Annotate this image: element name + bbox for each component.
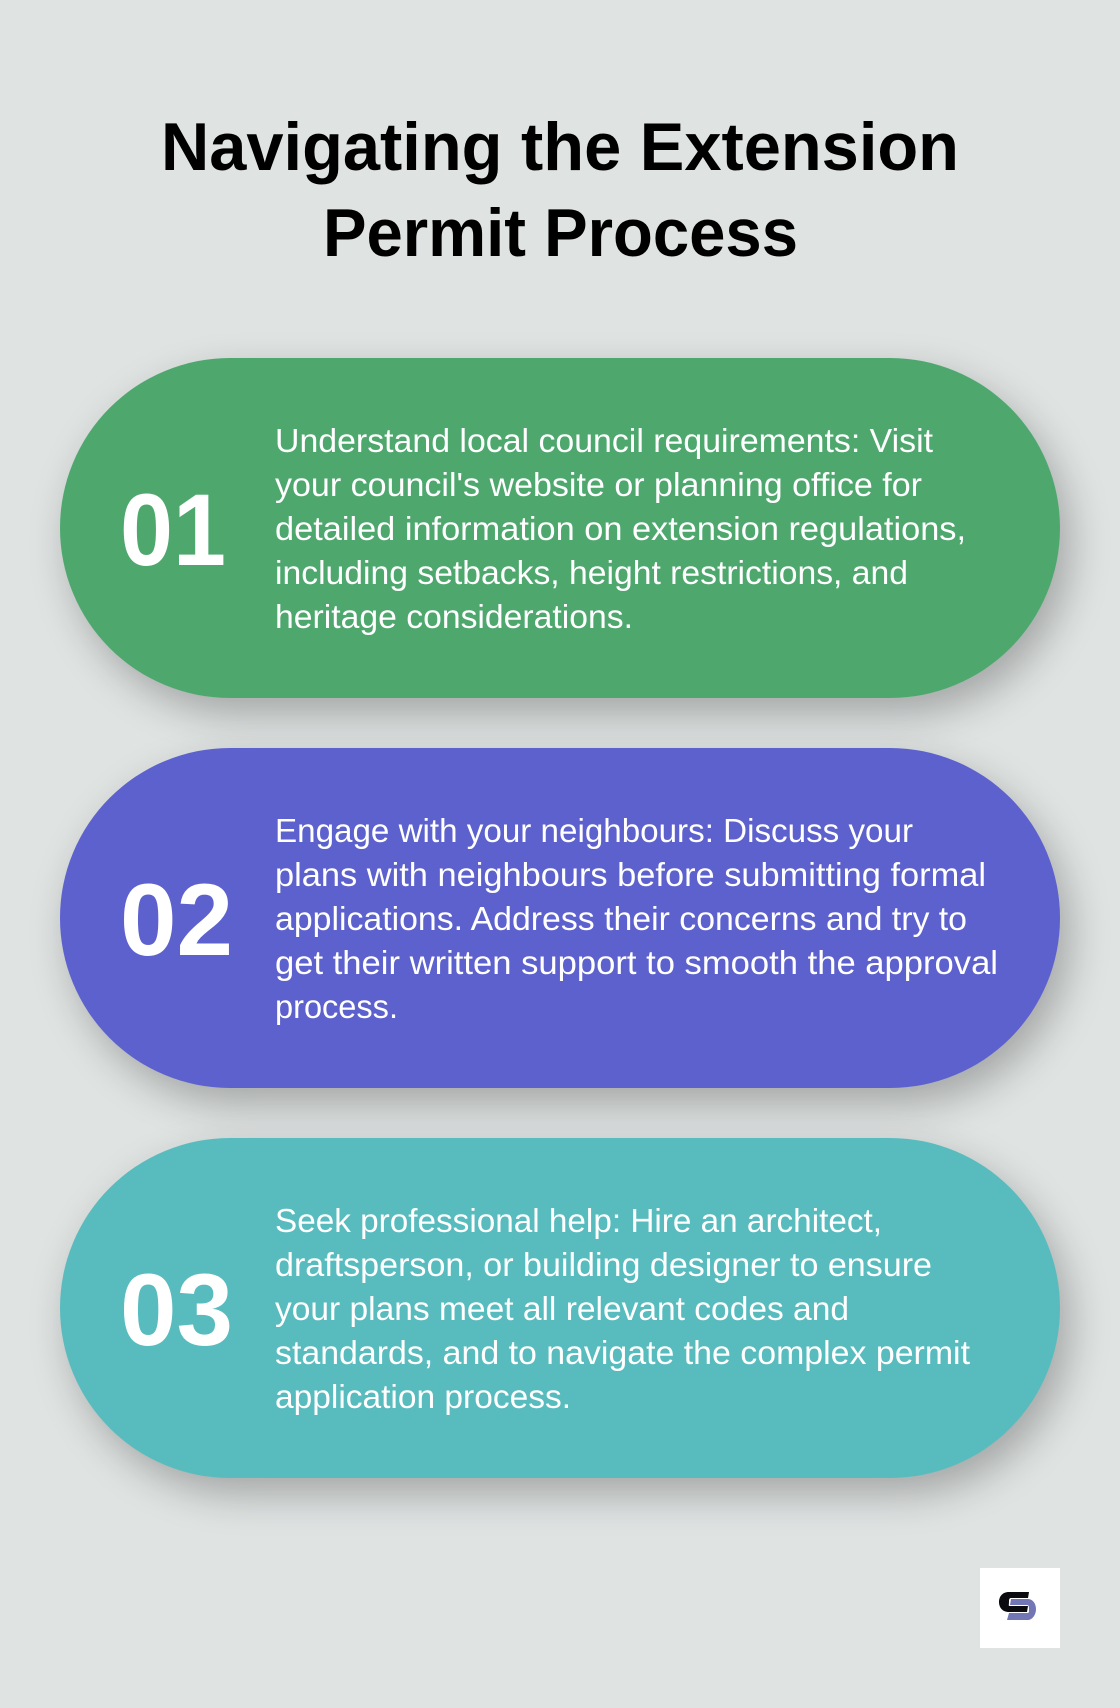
number 01: 01 [120, 473, 226, 587]
title: Permit Process [323, 195, 798, 271]
text: step 03 description: standards, and to navigate the complex permit [275, 1334, 970, 1371]
text: step 03 description [275, 1202, 970, 1415]
text: step 03 description: application process. [275, 1378, 571, 1415]
text: step 03 description: Seek professional help: Hire an architect, [275, 1202, 882, 1239]
text: step 02 description: applications. Address their concerns and try to [275, 900, 967, 937]
panel: step 02 [60, 748, 1060, 1088]
text: step 02 description: get their written support to smooth the approval [275, 944, 998, 981]
text: step 02 description [275, 812, 998, 1025]
text: step 03 description: your plans meet all relevant codes and [275, 1290, 849, 1327]
panel: step 01 [60, 358, 1060, 698]
text: step 01 description: Understand local council requirements: Visit [275, 422, 933, 459]
text: step 01 description: your council's website or planning office for [275, 466, 922, 503]
text: step 03 description: draftsperson, or building designer to ensure [275, 1246, 932, 1283]
title: Navigating the Extension [161, 109, 959, 185]
number 03: 03 [120, 1253, 233, 1367]
text: step 01 description: including setbacks, height restrictions, and [275, 554, 908, 591]
text: step 02 description: process. [275, 988, 398, 1025]
text: step 02 description: plans with neighbours before submitting formal [275, 856, 986, 893]
panel: step 03 [60, 1138, 1060, 1478]
icon: logo badge [980, 1568, 1060, 1648]
text: step 01 description: detailed information on extension regulations, [275, 510, 966, 547]
title [161, 109, 959, 271]
text: step 02 description: Engage with your neighbours: Discuss your [275, 812, 913, 849]
number 02: 02 [120, 863, 233, 977]
text: step 01 description: heritage considerations. [275, 598, 633, 635]
text: step 01 description [275, 422, 966, 635]
